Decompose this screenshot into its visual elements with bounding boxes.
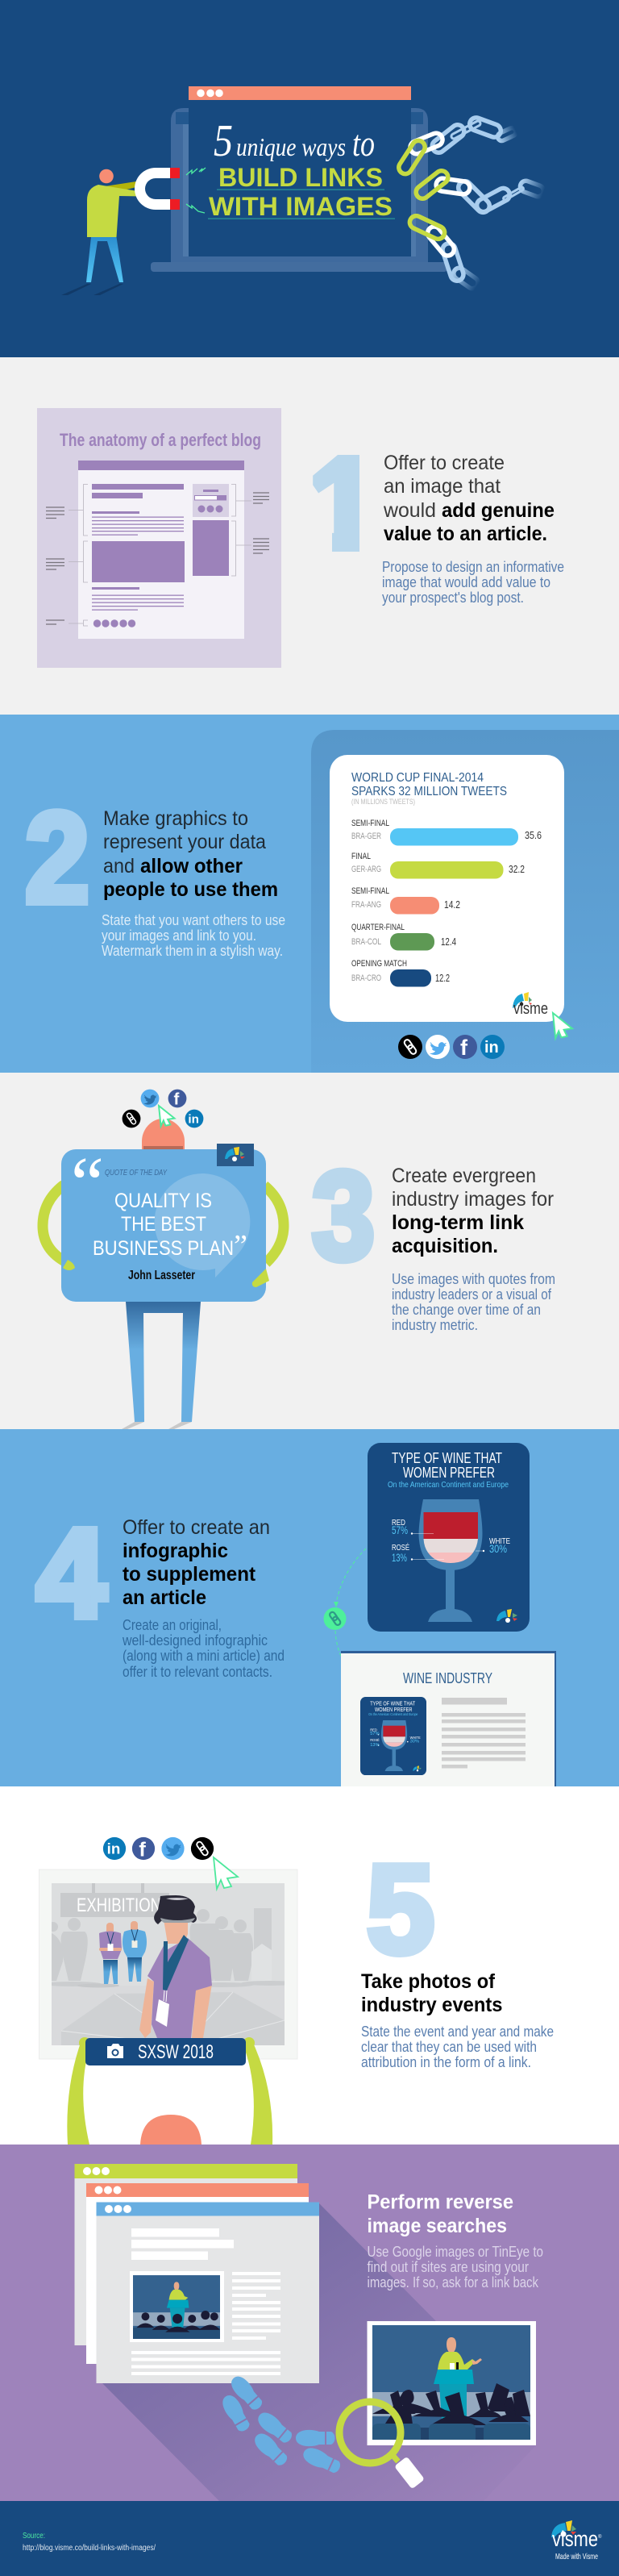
main person with headset xyxy=(139,1895,212,2038)
bar chart: SEMI-FINAL xyxy=(351,819,389,828)
description: Propose to design an informative xyxy=(382,559,564,575)
heading: industry images for xyxy=(392,1188,554,1211)
crowd silhouettes xyxy=(44,1909,299,1987)
heading: represent your data xyxy=(103,831,266,853)
chain middle xyxy=(413,169,545,215)
description: offer it to relevant contacts. xyxy=(123,1664,272,1680)
icon: cursor xyxy=(214,1857,238,1889)
quote text xyxy=(71,1142,247,1282)
bar chart xyxy=(351,819,542,987)
icon: linkedin: in xyxy=(188,1112,199,1126)
section 3: evergreen images xyxy=(0,1073,619,1429)
mini wine card: 13% xyxy=(370,1743,380,1748)
wine glass chart: RED xyxy=(392,1519,405,1528)
description xyxy=(102,912,285,959)
section 5: industry events xyxy=(39,1837,553,2145)
source: Source: xyxy=(23,2532,45,2541)
mini wine card: TYPE OF WINE THAT xyxy=(370,1699,415,1707)
window: blue xyxy=(97,2202,319,2383)
heading xyxy=(123,1516,270,1609)
wine glass chart xyxy=(392,1499,510,1622)
heading: infographic xyxy=(123,1540,228,1562)
description: the change over time of an xyxy=(392,1302,541,1318)
footprints xyxy=(219,2373,343,2476)
wine glass chart: 30% xyxy=(489,1542,507,1555)
description: Use Google images or TinEye to xyxy=(368,2244,543,2260)
bar chart: BRA-CRO xyxy=(351,973,381,983)
bar chart: 35.6 xyxy=(525,829,542,841)
visme logo: visme xyxy=(552,2527,598,2551)
title: unique ways xyxy=(236,132,346,161)
long shadow xyxy=(97,2203,536,2501)
quote card xyxy=(61,1149,266,1302)
event photo: EXHIBITION xyxy=(77,1894,161,1916)
small people xyxy=(99,1921,147,1984)
description xyxy=(392,1271,555,1333)
number 4: 4 xyxy=(36,1503,106,1644)
heading xyxy=(368,2190,513,2237)
chain top xyxy=(397,116,517,177)
social icons xyxy=(103,1837,214,1861)
backdrop panel xyxy=(311,730,619,1073)
icon: twitter xyxy=(161,1837,185,1860)
heading: people to use them xyxy=(103,878,278,901)
wine card xyxy=(368,1443,530,1632)
bar chart: GER-ARG xyxy=(351,865,381,874)
wine glass chart: WHITE xyxy=(489,1537,510,1546)
heading: Take photos of xyxy=(361,1970,496,1993)
wine glass chart: ROSÉ xyxy=(392,1542,409,1553)
browser bar xyxy=(189,86,411,100)
description: industry leaders or a visual of xyxy=(392,1286,552,1303)
quote text: BUSINESS PLAN xyxy=(93,1237,234,1260)
chart title: SPARKS 32 MILLION TWEETS xyxy=(351,785,507,798)
icon: linkedin: in xyxy=(484,1039,499,1057)
quote text: ” xyxy=(234,1229,247,1263)
heading: Offer to create xyxy=(384,452,505,474)
article text lines xyxy=(442,1698,526,1768)
section 1: offer an image xyxy=(0,357,619,715)
bar chart: 12.2 xyxy=(435,972,450,984)
section 6: reverse image search xyxy=(0,2145,619,2501)
icon: green link xyxy=(324,1607,347,1630)
icon: facebook: f xyxy=(460,1036,468,1060)
heading: Create evergreen xyxy=(392,1165,536,1187)
visme logo xyxy=(551,2520,602,2561)
icon: link xyxy=(123,1110,140,1128)
social icons xyxy=(123,1090,203,1128)
photo frame xyxy=(39,1869,299,2059)
chart title: WORLD CUP FINAL-2014 xyxy=(351,771,484,785)
description: Watermark them in a stylish way. xyxy=(102,943,283,959)
title: to xyxy=(352,123,375,164)
title: BUILD LINKS xyxy=(218,163,383,192)
title: WITH IMAGES xyxy=(209,192,393,221)
chart title: (IN MILLIONS TWEETS) xyxy=(351,798,415,806)
speaker xyxy=(434,2337,482,2420)
logo tab xyxy=(217,1144,254,1166)
heading: acquisition. xyxy=(392,1235,498,1257)
bar chart: 14.2 xyxy=(444,898,460,911)
heading xyxy=(361,1970,503,2016)
icon: twitter xyxy=(426,1035,450,1059)
bar chart: 32.2 xyxy=(509,863,525,875)
wine card: TYPE OF WINE THAT xyxy=(392,1450,502,1466)
description: image that would add value to xyxy=(382,574,550,590)
description: (along with a mini article) and xyxy=(123,1648,285,1664)
mini wine card: RED xyxy=(370,1728,377,1732)
article document: WINE INDUSTRY xyxy=(403,1670,492,1686)
bar chart: BRA-GER xyxy=(351,832,381,841)
window: green xyxy=(74,2164,297,2345)
visme logo xyxy=(513,992,548,1018)
description: your images and link to you. xyxy=(102,927,256,944)
icon: linkedin: in xyxy=(107,1840,120,1857)
description: State that you want others to use xyxy=(102,912,285,928)
quote text: “ xyxy=(71,1142,104,1224)
source: http://blog.visme.co/build-links-with-images/ xyxy=(23,2544,156,2553)
small speaker photo xyxy=(133,2275,220,2339)
chain bottom xyxy=(408,214,480,290)
heading: long-term link xyxy=(392,1211,524,1234)
icon: camera xyxy=(107,2044,123,2058)
section 2: graphics xyxy=(0,715,619,1073)
icon: cursor xyxy=(159,1106,174,1126)
logo xyxy=(496,1609,517,1623)
description: find out if sites are using your xyxy=(368,2259,529,2275)
quote text: QUOTE OF THE DAY xyxy=(105,1168,168,1178)
chart card xyxy=(330,755,564,1022)
number 5: 5 xyxy=(367,1840,434,1980)
number 1: 1 xyxy=(309,429,380,581)
heading xyxy=(383,452,555,545)
icon: facebook: f xyxy=(139,1838,146,1861)
description xyxy=(122,1617,285,1680)
dashed link arrows xyxy=(334,1549,366,1690)
number 3: 3 xyxy=(312,1146,375,1286)
wine glass chart: 13% xyxy=(392,1551,407,1564)
magnifying glass xyxy=(339,2402,425,2489)
bar chart: BRA-COL xyxy=(351,937,381,947)
head xyxy=(140,2115,201,2145)
source xyxy=(23,2532,156,2553)
description: State the event and year and make xyxy=(361,2024,554,2040)
mini wine card: 30% xyxy=(410,1739,419,1744)
heading: Offer to create an xyxy=(123,1516,270,1539)
annotations xyxy=(46,484,269,626)
bar chart: 12.4 xyxy=(441,936,456,948)
heading: value to an article. xyxy=(384,523,547,545)
description: industry metric. xyxy=(392,1317,478,1333)
social icons xyxy=(398,1035,505,1060)
heading: would xyxy=(383,499,436,522)
person with magnet xyxy=(61,168,206,295)
caption banner: SXSW 2018 xyxy=(138,2041,214,2063)
article document xyxy=(341,1651,556,1786)
description: images. If so, ask for a link back xyxy=(368,2274,539,2290)
seats xyxy=(372,2424,530,2440)
heading xyxy=(103,807,278,901)
description: attribution in the form of a link. xyxy=(361,2054,531,2070)
heading: an image that xyxy=(384,475,501,498)
heading: industry events xyxy=(361,1994,503,2016)
mini wine card: ROSÉ xyxy=(370,1738,380,1742)
wine card: WOMEN PREFER xyxy=(403,1465,495,1481)
section 4: infographic xyxy=(0,1429,619,1786)
heading: image searches xyxy=(368,2215,507,2237)
description xyxy=(361,2024,554,2070)
title: 5 xyxy=(214,116,233,166)
description: well-designed infographic xyxy=(122,1632,268,1649)
visme logo: visme xyxy=(513,1000,548,1018)
description: clear that they can be used with xyxy=(361,2039,537,2055)
mini wine card: 57% xyxy=(370,1732,380,1736)
icon: cursor xyxy=(553,1013,572,1038)
large speaker photo xyxy=(368,2321,536,2445)
title xyxy=(208,116,395,221)
wine glass chart: 57% xyxy=(392,1524,408,1536)
event photo xyxy=(44,1883,299,2045)
heading: Make graphics to xyxy=(103,807,248,830)
description: your prospect's blog post. xyxy=(382,590,524,606)
icon: link xyxy=(191,1837,214,1860)
quote text: John Lasseter xyxy=(128,1269,195,1282)
bar chart: SEMI-FINAL xyxy=(351,886,389,896)
browser windows xyxy=(74,2164,319,2383)
visme logo: ® xyxy=(598,2534,602,2540)
quote text: QUALITY IS xyxy=(114,1190,212,1212)
audience xyxy=(372,2383,530,2425)
icon: facebook: f xyxy=(173,1090,179,1109)
mini wine card: WHITE xyxy=(410,1736,421,1740)
heading xyxy=(392,1165,554,1257)
heading: an article xyxy=(123,1586,206,1609)
icon: twitter xyxy=(141,1090,159,1107)
chart title xyxy=(351,771,507,806)
heading: add genuine xyxy=(442,499,555,522)
bar chart: OPENING MATCH xyxy=(351,959,407,969)
heading: to supplement xyxy=(123,1563,256,1586)
quote text: THE BEST xyxy=(121,1213,206,1236)
section: header xyxy=(0,0,619,357)
heading: allow other xyxy=(140,855,243,877)
icon: link xyxy=(398,1035,422,1059)
window: salmon xyxy=(86,2183,309,2364)
figure with quote card xyxy=(43,1119,284,1429)
number 2: 2 xyxy=(25,786,89,929)
visme logo: Made with Visme xyxy=(555,2552,598,2561)
mini wine card xyxy=(360,1697,426,1775)
description: Use images with quotes from xyxy=(392,1271,555,1287)
description: Create an original, xyxy=(123,1617,222,1633)
mini wine card: On the American Continent and Europe xyxy=(368,1712,418,1716)
description xyxy=(382,559,564,606)
bar chart: FRA-ANG xyxy=(351,900,381,910)
footer xyxy=(0,2501,619,2576)
heading: Perform reverse xyxy=(368,2190,513,2213)
heading: and xyxy=(103,855,135,877)
panel: anatomy of a blog xyxy=(37,408,281,668)
caption banner xyxy=(67,2037,272,2145)
description xyxy=(368,2244,543,2290)
blog page xyxy=(78,461,244,639)
wine card: On the American Continent and Europe xyxy=(388,1480,509,1490)
panel title: The anatomy of a perfect blog xyxy=(60,430,261,450)
mini wine card: WOMEN PREFER xyxy=(375,1706,412,1713)
laptop illustration xyxy=(151,100,447,272)
bar chart: FINAL xyxy=(351,852,371,861)
bar chart: QUARTER-FINAL xyxy=(351,923,405,932)
